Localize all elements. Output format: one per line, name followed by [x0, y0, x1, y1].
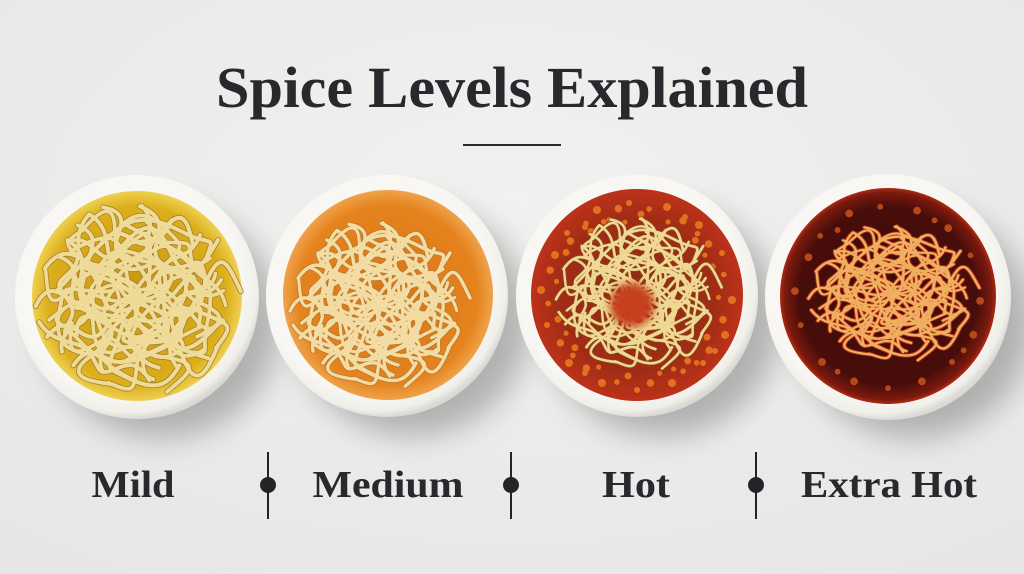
divider: hot / extra hot	[748, 452, 764, 519]
divider: mild / medium	[260, 452, 276, 519]
bowl: hot	[516, 175, 780, 436]
title: Spice Levels Explained	[216, 55, 808, 120]
title underline	[463, 144, 561, 146]
label: extra hot: Extra Hot	[801, 464, 977, 506]
label: mild: Mild	[92, 464, 174, 506]
divider: medium / hot	[503, 452, 519, 519]
label: hot: Hot	[602, 464, 670, 506]
bowl: medium	[266, 175, 530, 436]
label: medium: Medium	[312, 464, 464, 506]
bowl: mild	[15, 175, 280, 438]
bowl: extra hot	[765, 174, 1024, 438]
